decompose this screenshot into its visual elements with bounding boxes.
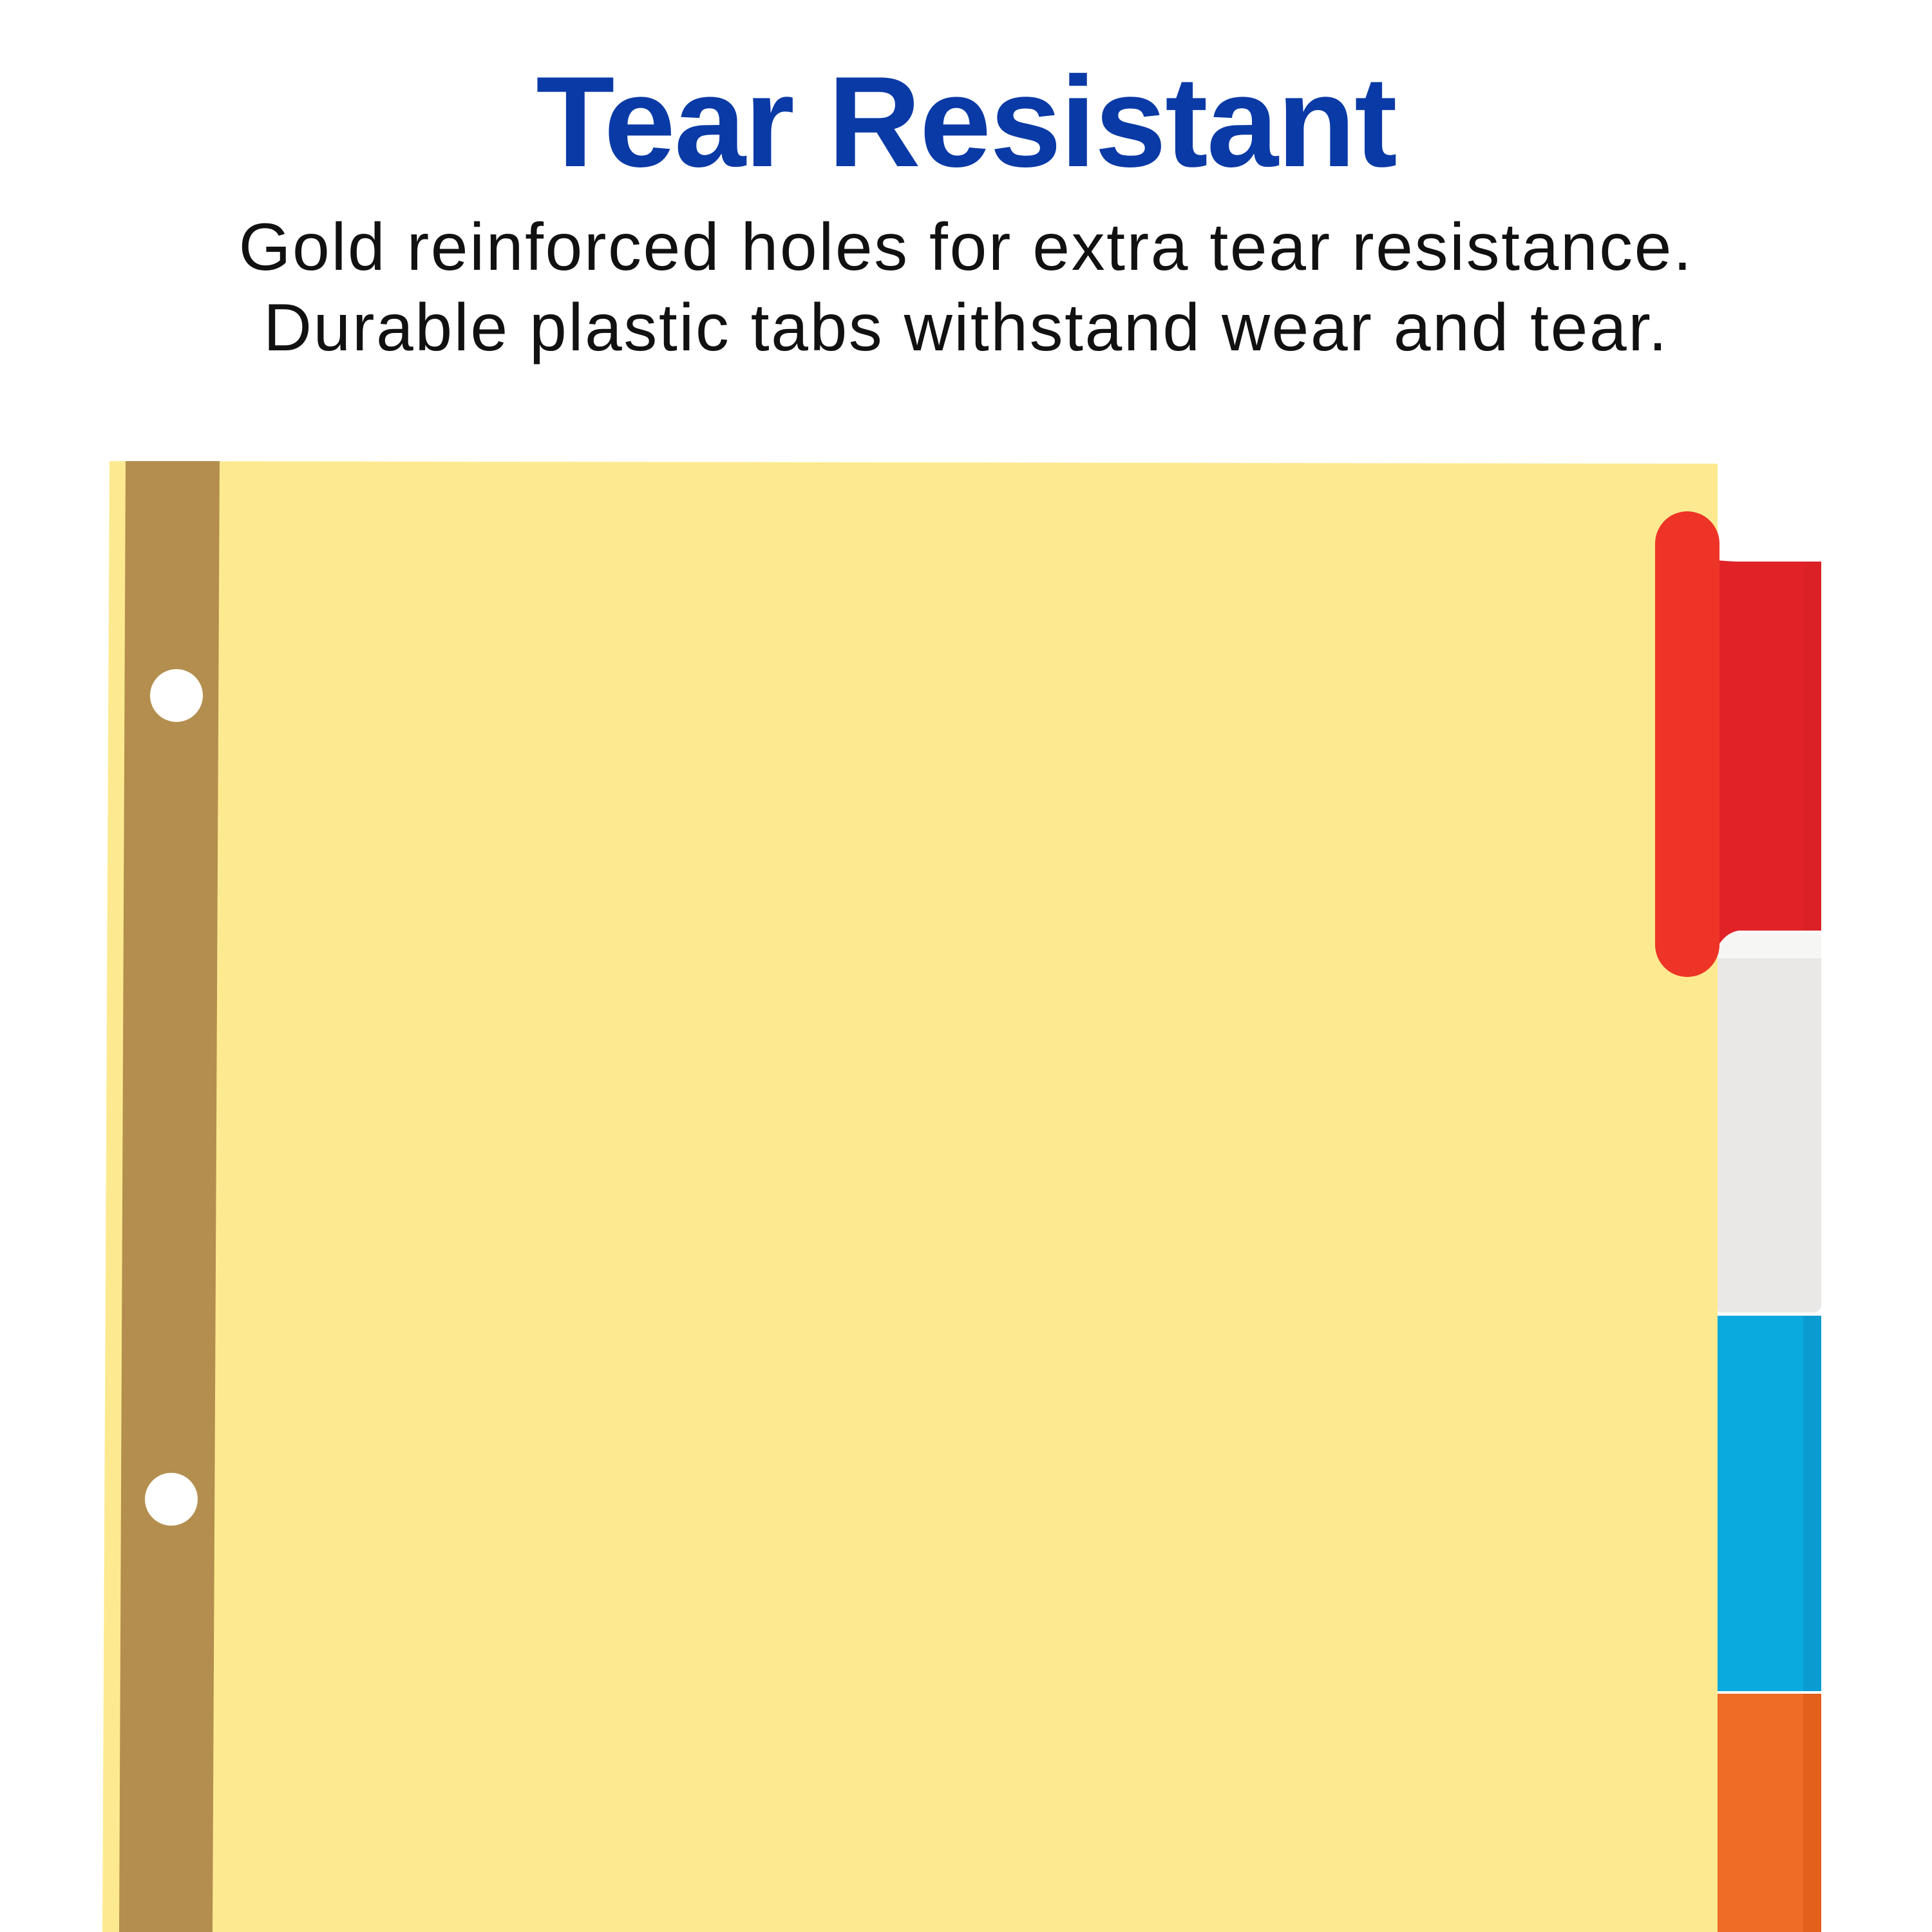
hole: top — [150, 669, 203, 722]
gold reinforced strip — [119, 461, 220, 1932]
subtitle text — [239, 210, 1693, 365]
divider paper — [102, 461, 1718, 1932]
tab: red — [1655, 511, 1821, 977]
hole: bottom — [145, 1473, 198, 1526]
subtitle text: Durable plastic tabs withstand wear and tear. — [263, 290, 1669, 365]
subtitle text: Gold reinforced holes for extra tear resistance. — [239, 210, 1693, 285]
tab: orange — [1714, 1694, 1821, 1932]
tab: white — [1714, 933, 1821, 1312]
tab: blue — [1714, 1316, 1821, 1691]
title: Tear Resistant — [536, 50, 1396, 194]
